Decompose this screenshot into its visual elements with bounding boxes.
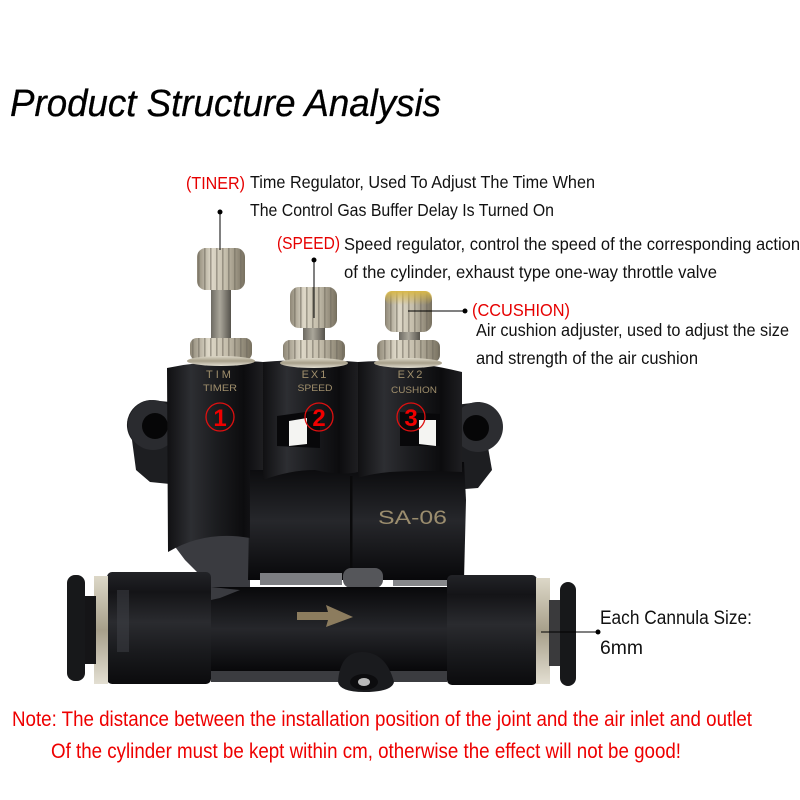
cylinder 2: [263, 360, 358, 480]
right fitting end: [536, 578, 576, 686]
cylinder 1: [167, 361, 263, 552]
knob assembly 2: [280, 287, 348, 368]
callout: speed: (SPEED): [277, 233, 340, 253]
engraved labels: TIMER: [203, 383, 238, 393]
number badge 3: 3: [404, 405, 418, 432]
engraved labels: EX2: [398, 369, 424, 381]
title: Product Structure Analysis: [10, 83, 441, 125]
bottom port: [338, 652, 394, 692]
engraved labels: [203, 369, 437, 395]
callout: cushion: (CCUSHION): [472, 300, 570, 320]
callout: speed: [277, 233, 800, 282]
callout: cannula size: Each Cannula Size:: [600, 608, 752, 629]
number badge 2: [305, 403, 333, 432]
leader line: speed: [312, 258, 316, 318]
model mark SA-06: SA-06: [378, 508, 447, 529]
callout: timer: (TINER): [186, 173, 245, 193]
engraved labels: TIM: [206, 369, 234, 381]
callout: timer: The Control Gas Buffer Delay Is Turned On: [250, 200, 554, 220]
number badge 2: 2: [312, 405, 326, 432]
window: cushion: [400, 412, 440, 446]
engraved labels: CUSHION: [391, 385, 437, 395]
callout: timer: [186, 172, 595, 220]
callout: timer: Time Regulator, Used To Adjust The Time When: [250, 172, 595, 192]
flow direction arrow: [297, 605, 353, 627]
leader line: cannula: [541, 630, 600, 634]
cylinder 3: [358, 361, 462, 478]
callout: cannula size: 6mm: [600, 638, 643, 659]
number badge 1: 1: [213, 405, 227, 432]
callout: cushion: and strength of the air cushion: [476, 348, 698, 368]
leader line: cushion: [408, 308, 468, 314]
callout: speed: of the cylinder, exhaust type one-way throttle valve: [344, 262, 717, 282]
note: [12, 708, 752, 763]
left mounting ear: [127, 400, 178, 484]
engraved labels: EX1: [302, 369, 328, 381]
left fitting end: [67, 575, 108, 684]
callout: cushion: [472, 300, 789, 368]
knob assembly 1: [187, 248, 255, 366]
product photo: pneumatic valve: [67, 248, 576, 692]
callout: cannula size: [600, 608, 752, 659]
knob assembly 3: [374, 291, 442, 368]
window: speed: [277, 410, 320, 448]
horizontal body block: [248, 462, 466, 580]
note: Of the cylinder must be kept within cm, otherwise the effect will not be good!: [51, 740, 681, 763]
leader line: timer: [218, 210, 222, 250]
engraved labels: SPEED: [298, 383, 333, 393]
number badge 3: [397, 403, 425, 432]
tee connector neck: [170, 530, 250, 600]
main tee pipe: [67, 572, 576, 692]
right mounting ear: [452, 402, 503, 490]
tee pipe slots: [211, 568, 447, 682]
number badge 1: [206, 403, 234, 432]
